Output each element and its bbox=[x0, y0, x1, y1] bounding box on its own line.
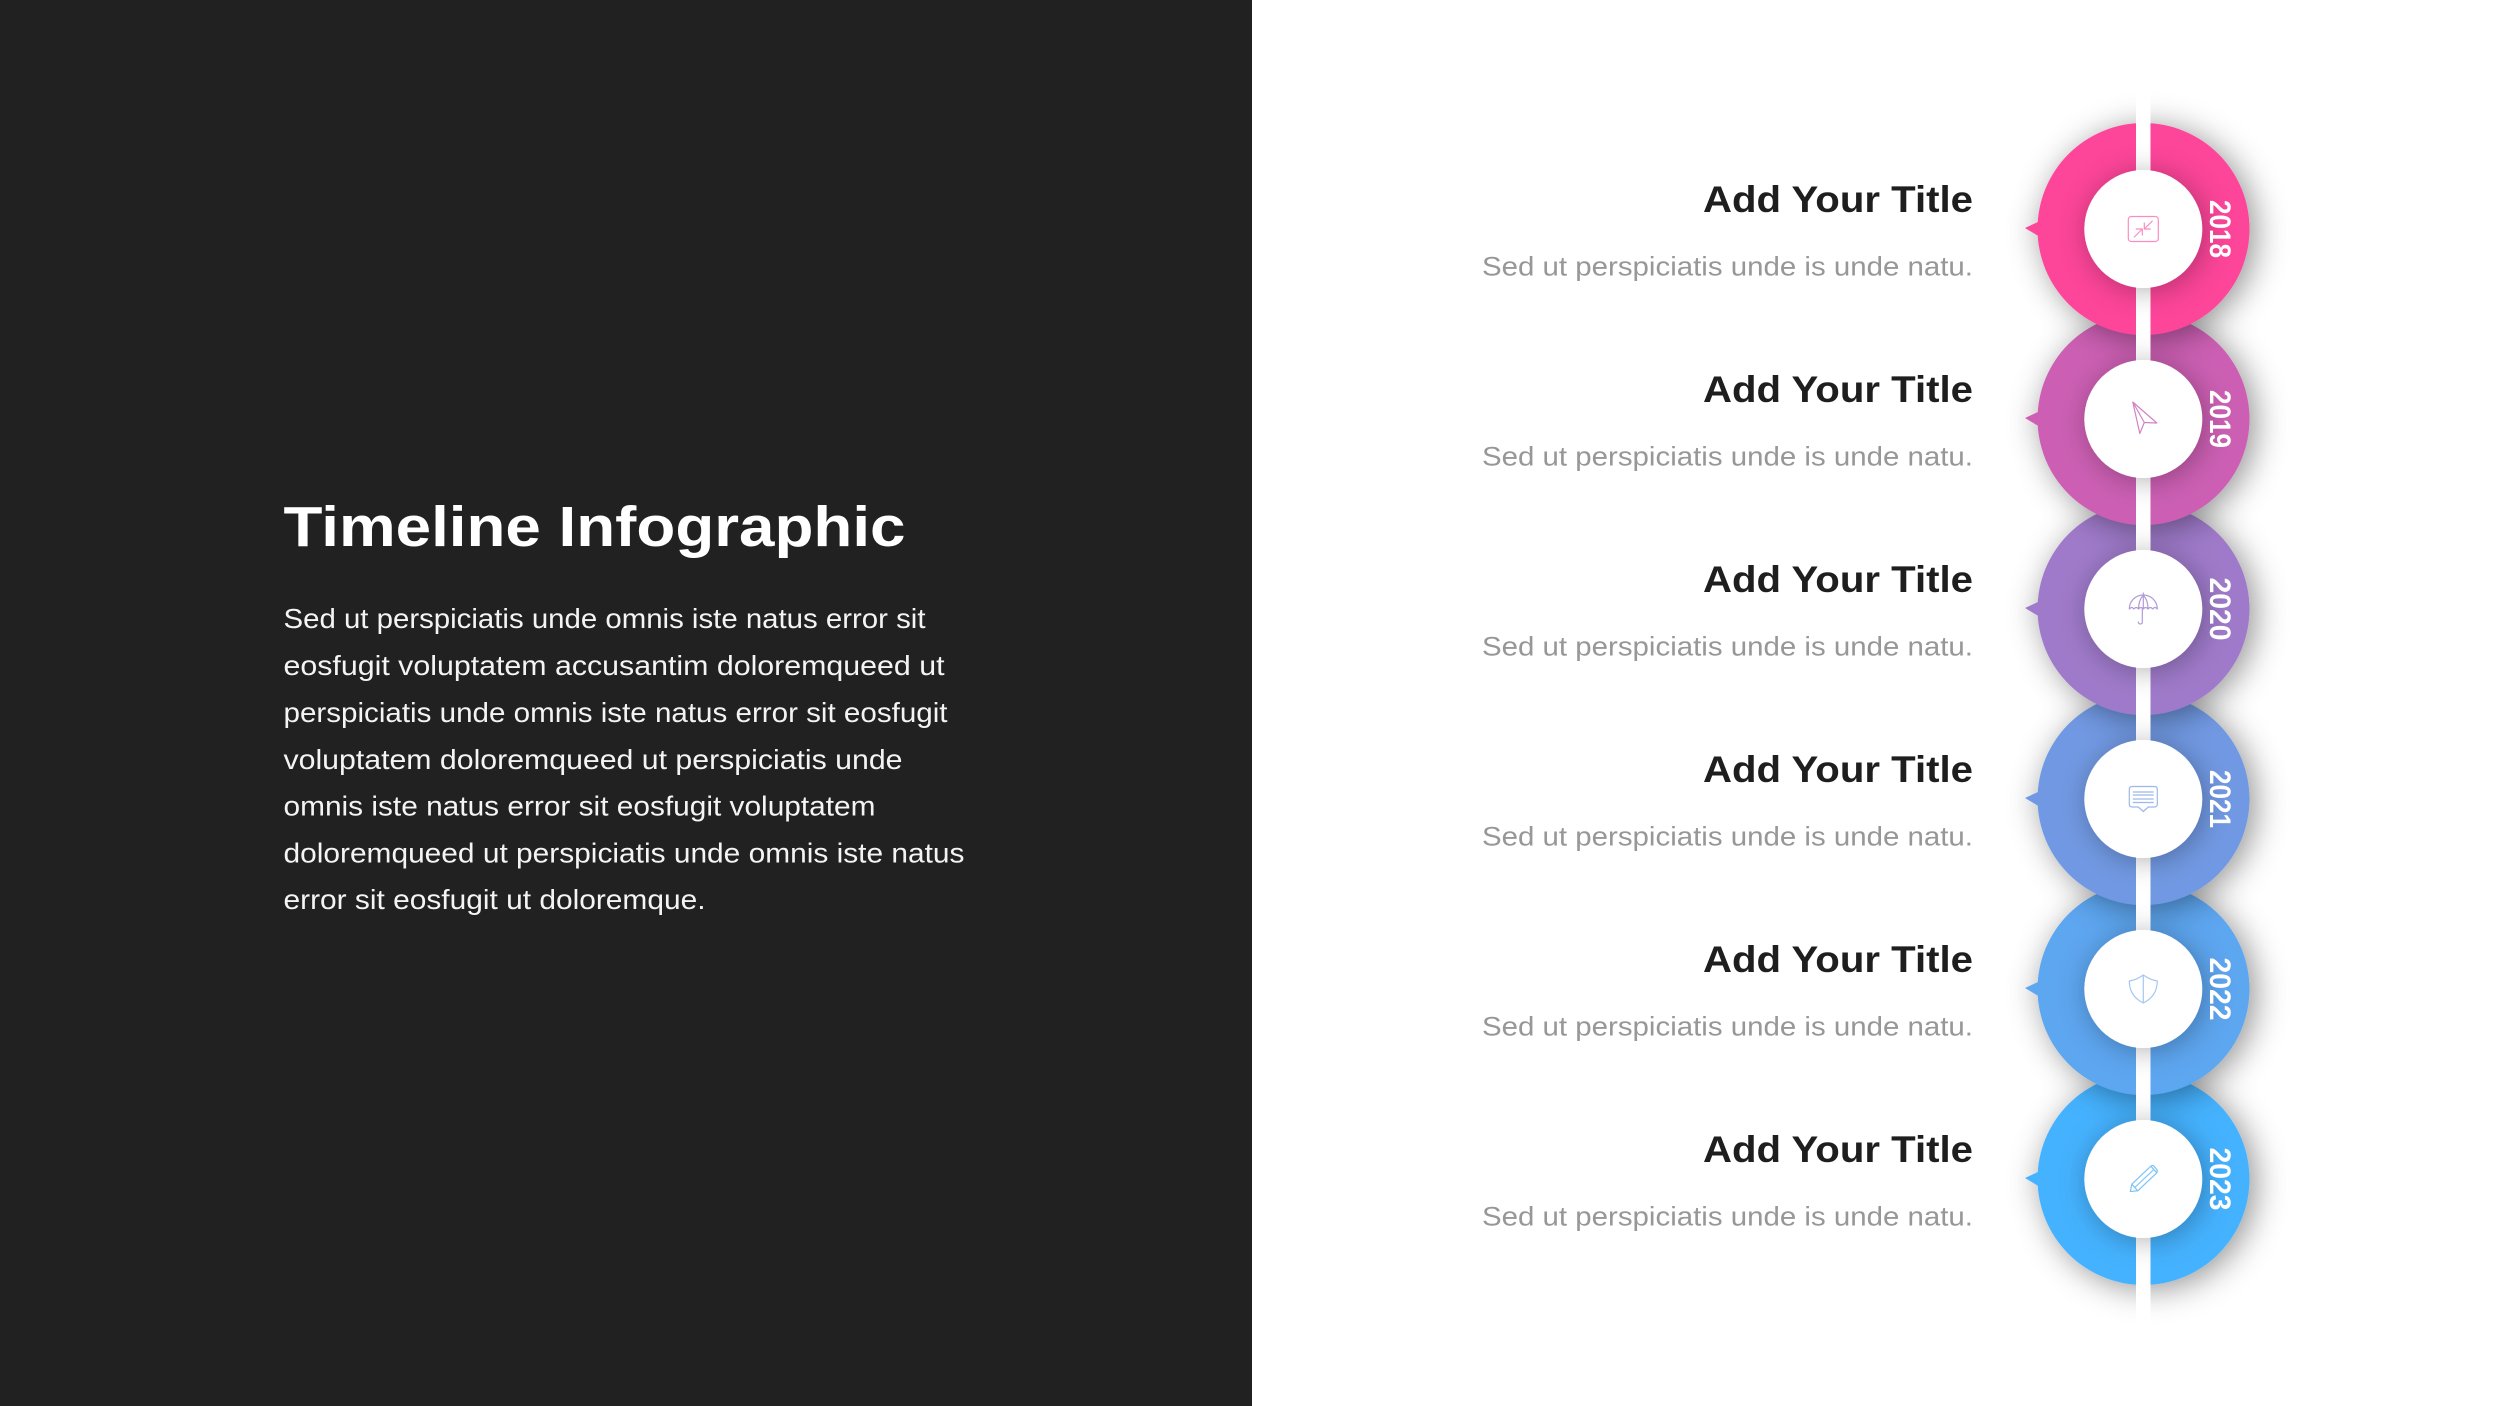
text block: intro paragraph: error sit eosfugit ut doloremque. bbox=[284, 884, 706, 915]
text block: 2021 entry: Sed ut perspiciatis unde is unde natu. bbox=[1482, 822, 1973, 852]
text block: intro paragraph: Sed ut perspiciatis unde omnis iste natus error sit bbox=[284, 603, 926, 634]
text block: 2023 entry bbox=[1482, 1129, 1973, 1232]
text block: intro paragraph: voluptatem doloremqueed ut perspiciatis unde bbox=[284, 744, 902, 775]
year 2021: 2021 bbox=[2203, 770, 2236, 828]
hub 2023 bbox=[2084, 1120, 2202, 1238]
text block: 2018 entry: Sed ut perspiciatis unde is unde natu. bbox=[1482, 252, 1973, 282]
text block: 2022 entry: Sed ut perspiciatis unde is unde natu. bbox=[1482, 1012, 1973, 1042]
text block: 2023 entry: Sed ut perspiciatis unde is unde natu. bbox=[1482, 1202, 1973, 1232]
panel: intro text bbox=[284, 495, 964, 915]
text block: 2019 entry bbox=[1482, 369, 1973, 472]
icon: shield bbox=[2129, 975, 2157, 1003]
icon: umbrella bbox=[2129, 593, 2157, 624]
icon: compress arrows bbox=[2128, 216, 2158, 242]
text block: 2020 entry bbox=[1482, 559, 1973, 662]
year 2022: 2022 bbox=[2203, 958, 2236, 1020]
vertical timeline bar bbox=[2136, 60, 2150, 1350]
white hubs and year labels bbox=[2084, 170, 2236, 1238]
year 2023: 2023 bbox=[2203, 1148, 2236, 1210]
year 2020: 2020 bbox=[2203, 578, 2236, 640]
ring 2019 bbox=[2025, 313, 2250, 525]
text block: 2020 entry: Add Your Title bbox=[1703, 559, 1973, 600]
text block: intro paragraph: eosfugit voluptatem accusantim doloremqueed ut bbox=[284, 650, 945, 681]
text block: 2018 entry: Add Your Title bbox=[1703, 179, 1973, 220]
text block: intro paragraph: perspiciatis unde omnis iste natus error sit eosfugit bbox=[284, 697, 948, 728]
text block: intro paragraph bbox=[284, 603, 964, 915]
timeline rings bbox=[2025, 123, 2250, 1285]
icon: pencil bbox=[2130, 1166, 2157, 1192]
ring 2018 bbox=[2025, 123, 2250, 335]
ring 2020 bbox=[2025, 503, 2250, 715]
text block: intro paragraph: omnis iste natus error sit eosfugit voluptatem bbox=[284, 790, 876, 822]
text block: 2023 entry: Add Your Title bbox=[1703, 1129, 1973, 1170]
text block: 2020 entry: Sed ut perspiciatis unde is unde natu. bbox=[1482, 632, 1973, 662]
icon: message bubble bbox=[2129, 786, 2157, 812]
ring 2022 bbox=[2025, 883, 2250, 1095]
year 2018: 2018 bbox=[2203, 200, 2236, 258]
text block: 2022 entry bbox=[1482, 939, 1973, 1042]
icon: cursor arrow bbox=[2133, 402, 2157, 434]
hub 2019 bbox=[2084, 360, 2202, 478]
text block: 2021 entry bbox=[1482, 749, 1973, 852]
ring 2021 bbox=[2025, 693, 2250, 905]
text block: 2022 entry: Add Your Title bbox=[1703, 939, 1973, 980]
text block: 2021 entry: Add Your Title bbox=[1703, 749, 1973, 790]
hub 2020 bbox=[2084, 550, 2202, 668]
text block: 2019 entry: Sed ut perspiciatis unde is unde natu. bbox=[1482, 442, 1973, 472]
hub 2018 bbox=[2084, 170, 2202, 288]
panel: dark left background bbox=[0, 0, 1252, 1406]
ring 2023 bbox=[2025, 1073, 2250, 1285]
hub 2021 bbox=[2084, 740, 2202, 858]
text block: 2018 entry bbox=[1482, 179, 1973, 282]
heading: Timeline Infographic: Timeline Infographic bbox=[284, 495, 906, 559]
text block: intro paragraph: doloremqueed ut perspiciatis unde omnis iste natus bbox=[284, 838, 964, 868]
year 2019: 2019 bbox=[2203, 390, 2236, 448]
hub 2022 bbox=[2084, 930, 2202, 1048]
text block: 2019 entry: Add Your Title bbox=[1703, 369, 1973, 410]
